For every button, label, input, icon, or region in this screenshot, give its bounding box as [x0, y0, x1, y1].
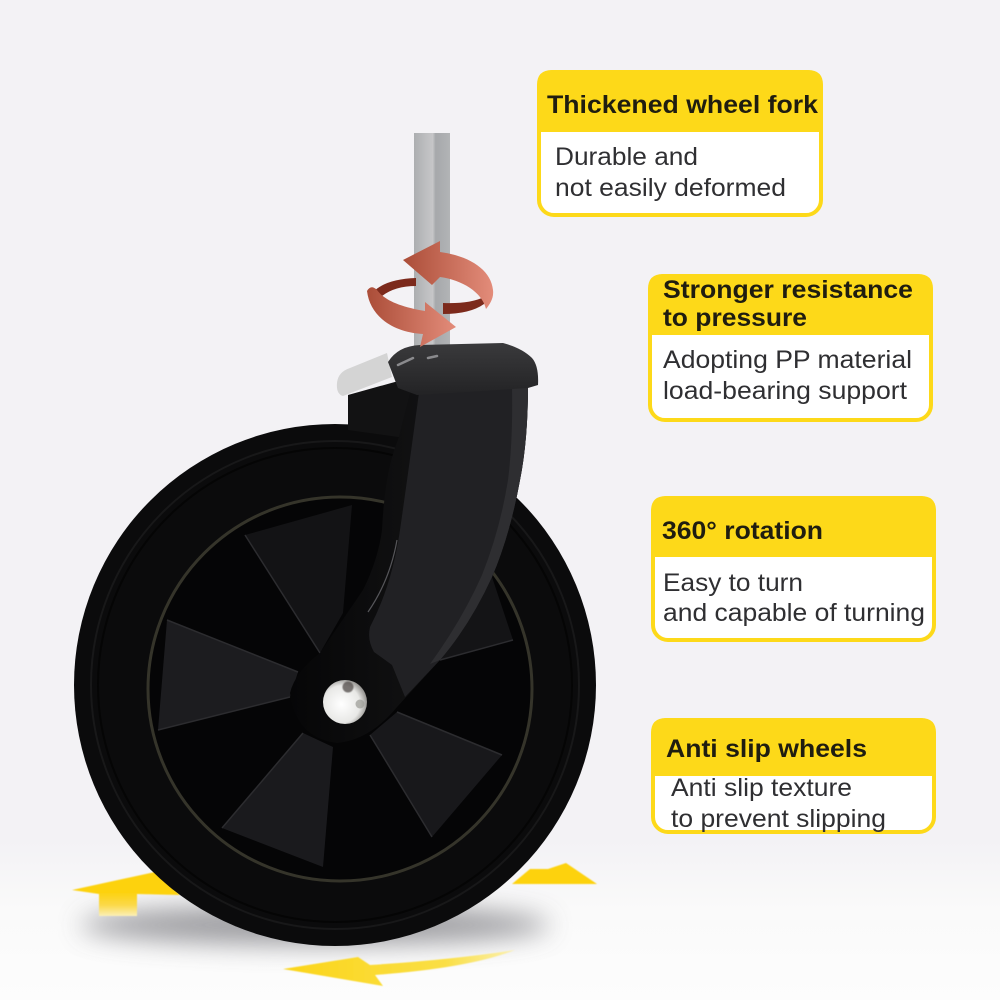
wheel fork — [290, 343, 538, 743]
text block: Anti slip texture — [671, 774, 852, 802]
tire — [74, 424, 596, 946]
text block: load-bearing support — [663, 377, 907, 405]
ground surface — [0, 840, 1000, 1000]
wheel — [74, 424, 596, 946]
upper ribbon arrow — [403, 241, 493, 309]
panel: 360 rotation — [651, 496, 936, 640]
arrow: yellow ground curve — [283, 950, 515, 986]
silver tab — [337, 353, 392, 396]
text block: Durable and — [555, 143, 698, 171]
text block — [663, 346, 912, 405]
rotation arrows icon — [367, 241, 493, 347]
axle bolt — [323, 680, 367, 724]
wheel ground shadow — [80, 905, 550, 945]
text block — [663, 569, 925, 627]
arrow: yellow left direction — [72, 872, 180, 916]
fork edge band — [430, 385, 528, 664]
fork lighter panel — [369, 385, 528, 697]
heading: to pressure — [663, 304, 807, 332]
text block — [671, 774, 886, 833]
text block: Easy to turn — [663, 569, 803, 597]
pole — [414, 133, 450, 348]
lower ribbon arrow — [367, 287, 456, 347]
heading — [663, 276, 913, 332]
fork arm — [290, 385, 528, 743]
fork cap — [388, 343, 538, 395]
panel: anti slip wheels — [651, 718, 936, 833]
heading: Anti slip wheels — [666, 735, 867, 763]
back ring — [373, 278, 484, 314]
bracket behind fork — [348, 375, 420, 440]
rim — [148, 497, 532, 881]
heading: 360° rotation — [662, 517, 823, 545]
spokes — [158, 505, 513, 867]
text block: not easily deformed — [555, 174, 786, 202]
text block: Adopting PP material — [663, 346, 912, 374]
heading: Thickened wheel fork — [547, 91, 818, 119]
text block: and capable of turning — [663, 599, 925, 627]
text block — [555, 143, 786, 202]
text block: to prevent slipping — [671, 805, 886, 833]
panel: stronger resistance — [648, 274, 933, 420]
arrow: yellow right direction — [512, 863, 597, 884]
fork highlight line — [368, 540, 397, 612]
panel: thickened wheel fork — [537, 70, 823, 215]
heading: Stronger resistance — [663, 276, 913, 304]
cap highlights — [398, 356, 437, 365]
